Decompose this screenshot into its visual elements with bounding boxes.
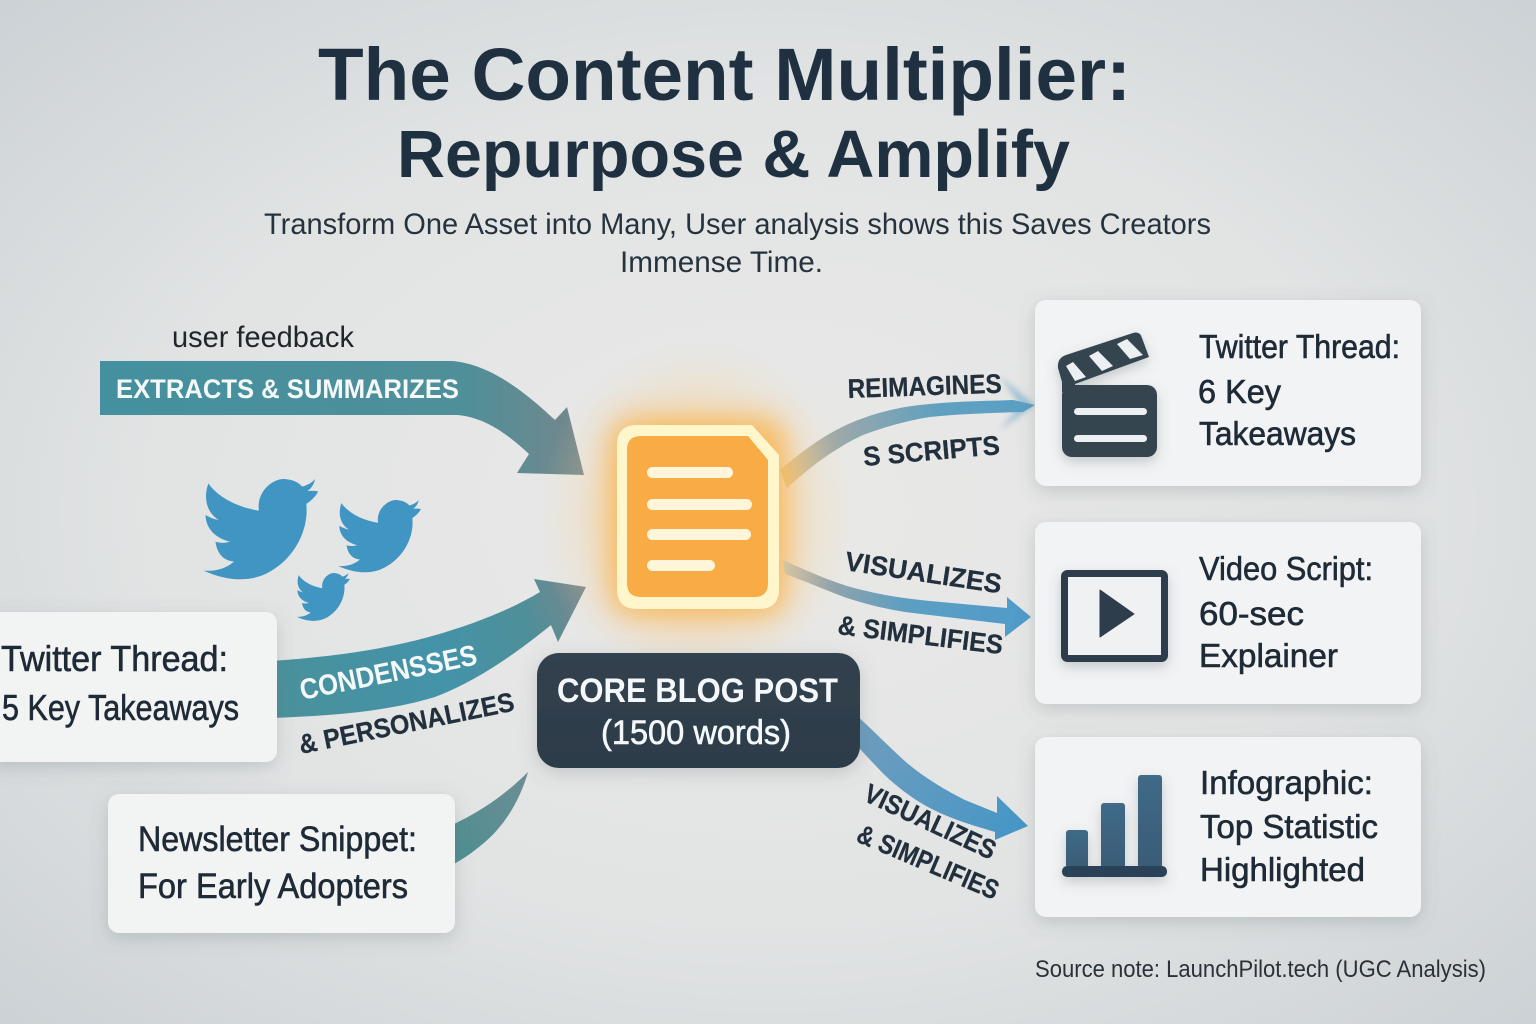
panel text: twitter thread output: 6 Key <box>1198 373 1281 410</box>
annotation: user feedback: user feedback <box>172 321 355 354</box>
arrow: extracts and summarizes <box>100 361 584 475</box>
panel text: twitter thread output <box>1198 328 1400 452</box>
panel text: infographic: Top Statistic <box>1200 808 1378 845</box>
arrow: condenses: CONDENSSES <box>297 640 480 707</box>
glow behind document <box>538 342 858 692</box>
panel text: twitter thread output: Twitter Thread: <box>1199 328 1400 365</box>
core blog post label <box>537 653 860 768</box>
panel text: infographic: Infographic: <box>1200 764 1373 801</box>
core blog post label: CORE BLOG POST <box>557 672 838 710</box>
panel text: newsletter snippet <box>138 820 417 906</box>
label: visualizes lower: VISUALIZES <box>859 778 1001 865</box>
panel: output twitter thread <box>1035 300 1421 486</box>
panel: video script <box>1035 522 1421 704</box>
icon: document <box>617 425 779 609</box>
icon: play frame <box>1064 574 1164 658</box>
panel text: infographic <box>1200 764 1378 888</box>
source note: Source note: LaunchPilot.tech (UGC Analysis) <box>1035 956 1486 983</box>
core blog post label: (1500 words) <box>601 714 791 752</box>
icon: bar chart <box>1062 775 1167 877</box>
label: visualizes upper: VISUALIZES <box>843 546 1004 599</box>
arrow: newsletter to core <box>450 772 528 866</box>
label: simplifies lower: & SIMPLIFIES <box>853 819 1003 906</box>
arrow: extracts and summarizes: EXTRACTS & SUMMARIZES <box>116 374 459 404</box>
arrow: visualizes to infographic <box>855 714 1028 840</box>
label: personalizes: & PERSONALIZES <box>296 687 517 760</box>
icon: twitter birds <box>204 479 421 621</box>
label: scripts: S SCRIPTS <box>862 430 1001 472</box>
icon: clapperboard <box>1058 333 1157 457</box>
panel text: twitter thread <box>1 638 239 728</box>
panel text: twitter thread: 5 Key Takeaways <box>2 687 239 728</box>
panel text: newsletter snippet: For Early Adopters <box>138 867 408 906</box>
panel text: video script: Explainer <box>1199 637 1338 674</box>
panel: newsletter snippet <box>108 794 455 933</box>
label: simplifies upper: & SIMPLIFIES <box>836 610 1005 660</box>
panel text: infographic: Highlighted <box>1200 851 1365 888</box>
title: The Content Multiplier: <box>318 33 1131 116</box>
title: Repurpose & Amplify <box>397 117 1070 192</box>
arrow: reimagines <box>780 376 1035 488</box>
panel text: video script: Video Script: <box>1199 550 1373 587</box>
arrow: visualizes to video <box>783 560 1031 637</box>
subtitle <box>264 208 1211 279</box>
panel: left twitter thread <box>0 612 277 762</box>
title <box>318 33 1131 192</box>
panel: infographic <box>1035 737 1421 917</box>
subtitle: Immense Time. <box>620 246 823 279</box>
label: reimagines: REIMAGINES <box>847 369 1002 404</box>
subtitle: Transform One Asset into Many, User analysis shows this Saves Creators <box>264 208 1211 241</box>
panel text: video script <box>1199 550 1373 674</box>
panel text: newsletter snippet: Newsletter Snippet: <box>138 820 417 859</box>
panel text: video script: 60-sec <box>1199 595 1304 632</box>
arrow: condenses <box>270 579 586 718</box>
panel text: twitter thread output: Takeaways <box>1199 415 1356 452</box>
panel text: twitter thread: Twitter Thread: <box>1 638 228 679</box>
